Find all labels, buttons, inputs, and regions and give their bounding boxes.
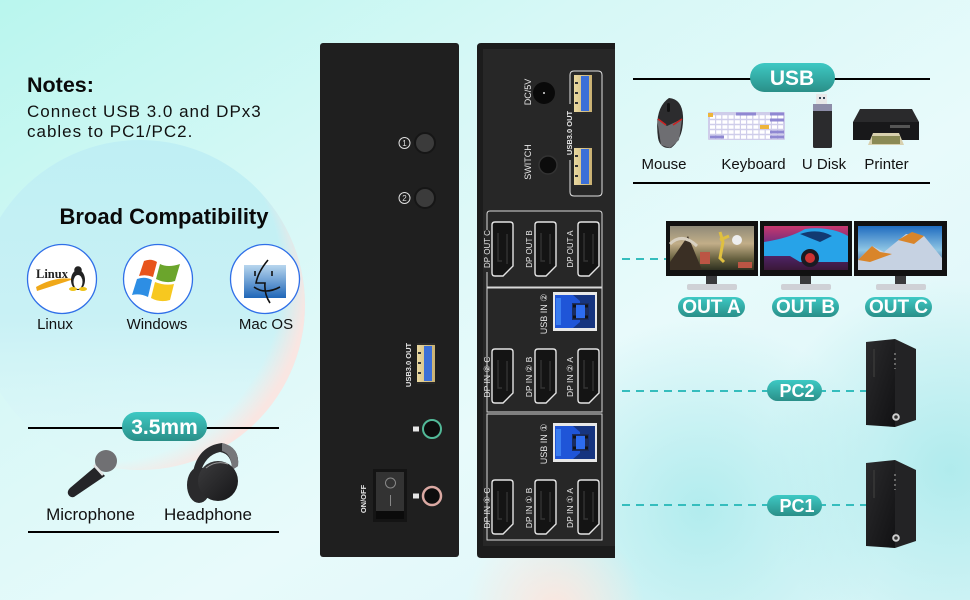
icon: U disk — [813, 94, 832, 148]
monitor: OUT C — [854, 221, 947, 290]
USB port — [404, 342, 435, 387]
button 1 — [399, 133, 435, 153]
monitor: OUT B — [760, 221, 852, 290]
DP output group — [483, 211, 602, 287]
USB output group — [565, 71, 602, 196]
notes text block — [27, 73, 262, 141]
label: U disk: U Disk — [802, 156, 847, 173]
PC2 input group: USB IN ② — [539, 294, 549, 334]
heading: broad compatibility: Broad Compatibility — [59, 204, 269, 229]
USB port: USB3.0 OUT — [404, 342, 413, 387]
connector: PC1 — [622, 504, 866, 506]
icon: printer — [853, 109, 919, 145]
PC1 input group — [482, 414, 602, 540]
panel: rear of KVM switch — [477, 43, 615, 558]
section: USB devices — [633, 63, 930, 183]
monitor: OUT A — [666, 221, 758, 290]
power switch: ON/OFF — [359, 484, 368, 513]
switch socket — [523, 144, 557, 180]
pill: OUT B: OUT B — [776, 297, 835, 318]
DP output group: DP OUT B — [525, 230, 534, 268]
audio jack: headphone — [413, 487, 441, 505]
pill: PC1: PC1 — [779, 496, 815, 516]
label: headphone: Headphone — [164, 505, 252, 524]
button 1: 1 — [402, 139, 407, 148]
connector: DP output to monitors — [622, 258, 666, 260]
PC1 input group: DP IN ① C — [482, 488, 492, 528]
label: microphone: Microphone — [46, 505, 135, 524]
PC2 input group: DP IN ② A — [565, 357, 575, 397]
panel: front of KVM switch — [320, 43, 459, 557]
icon: Linux: Linux — [36, 267, 69, 281]
icon: Linux — [28, 244, 96, 314]
notes text block: cables to PC1/PC2. — [27, 122, 193, 141]
icon: PC1 tower — [866, 460, 916, 548]
pill: 3.5mm: 3.5mm — [131, 416, 198, 439]
pill: OUT A: OUT A — [682, 297, 741, 318]
PC1 input group: DP IN ① B — [524, 487, 534, 528]
button 2 — [399, 188, 435, 208]
icon: Mac OS — [230, 244, 300, 314]
USB output group: USB3.0 OUT — [565, 110, 574, 155]
DP output group: DP OUT A — [566, 230, 575, 268]
pill: 3.5mm — [122, 412, 207, 441]
icon: mouse — [657, 98, 683, 148]
PC2 input group — [482, 288, 602, 412]
notes text block: Notes: — [27, 73, 94, 97]
power switch — [359, 469, 407, 522]
pill: USB: USB — [770, 67, 814, 90]
DP output group: DP OUT C — [483, 230, 492, 268]
PC2 input group: DP IN ② B — [524, 356, 534, 397]
button 2: 2 — [402, 194, 407, 203]
pill: USB — [750, 63, 835, 92]
label: Linux: Linux — [37, 316, 73, 333]
PC1 input group: DP IN ① A — [565, 488, 575, 528]
icon: PC2 tower — [866, 339, 916, 427]
pill: OUT C: OUT C — [869, 297, 928, 318]
PC2 input group: DP IN ② C — [482, 356, 492, 398]
label: mouse: Mouse — [641, 156, 687, 173]
icon: Windows — [124, 244, 192, 314]
audio jack: microphone — [413, 420, 441, 438]
label: Mac OS: Mac OS — [239, 316, 293, 333]
DC jack: DC/5V — [523, 79, 533, 105]
pill: PC2 — [767, 380, 822, 401]
label: printer: Printer — [864, 156, 909, 173]
connector: PC2 — [622, 390, 866, 392]
DC jack — [523, 79, 555, 105]
icon: microphone — [68, 450, 117, 497]
icon: headphone — [187, 443, 238, 503]
pill: PC1 — [767, 495, 822, 516]
label: Windows: Windows — [127, 316, 187, 333]
pill: PC2: PC2 — [779, 381, 815, 401]
PC1 input group: USB IN ① — [539, 424, 549, 464]
section: 3.5mm devices — [28, 412, 279, 532]
notes text block: Connect USB 3.0 and DPx3 — [27, 102, 262, 121]
label: keyboard: Keyboard — [721, 156, 786, 173]
switch socket: SWITCH — [523, 144, 533, 180]
icon: keyboard — [708, 112, 785, 140]
